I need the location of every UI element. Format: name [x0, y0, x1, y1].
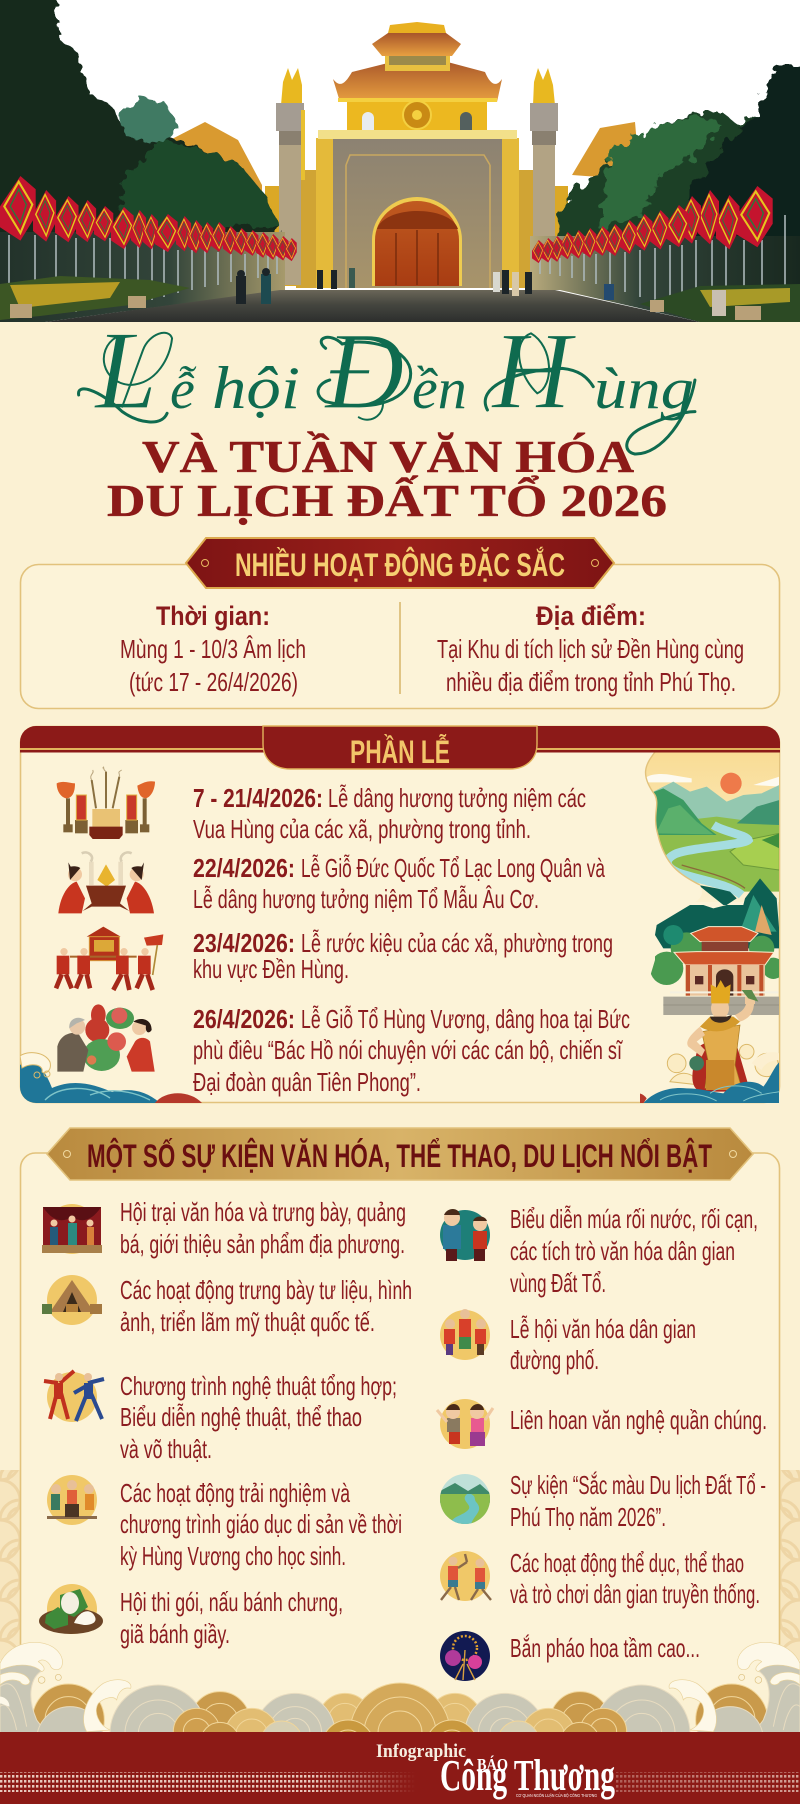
bottom center mound	[322, 1683, 478, 1783]
side patterns	[0, 1470, 800, 1660]
icon: tent	[42, 1275, 102, 1325]
gate side walls	[265, 170, 568, 288]
plaza ground	[45, 290, 700, 322]
red mound	[155, 1093, 202, 1103]
icon: banh chung	[39, 1584, 103, 1634]
bottom waves left half	[0, 1642, 372, 1782]
ceremony text: 26/4: Lễ Giỗ Tổ Hùng Vương, dâng hoa tại Bức	[301, 1004, 630, 1034]
ceremony text: 7 - 21/4: Vua Hùng của các xã, phường trong tỉnh.	[193, 814, 531, 844]
ceremony text: 22/4: 22/4/2026:	[193, 853, 295, 883]
logo: bao cong thuong	[440, 1751, 615, 1800]
bottom waves right half	[428, 1642, 800, 1782]
ceremony text: 26/4: Đại đoàn quân Tiên Phong”.	[193, 1067, 421, 1097]
icons and ceremony items	[56, 767, 630, 1097]
white foam crests	[0, 1642, 62, 1672]
item text	[120, 1371, 397, 1464]
trees near temple	[650, 925, 784, 985]
item text	[510, 1470, 766, 1532]
icon: landscape	[440, 1474, 490, 1524]
place block: Địa điểm:	[536, 601, 646, 631]
temple roof lower	[674, 952, 774, 965]
subtitle line 1: VÀ TUẦN VĂN HÓA	[142, 432, 635, 482]
banner: activities: NHIỀU HOẠT ĐỘNG ĐẶC SẮC	[235, 547, 565, 583]
right illustration: landscape, temple and king	[630, 752, 784, 1103]
item text	[510, 1204, 758, 1298]
logo: bao cong thuong: Công Thương	[440, 1751, 615, 1800]
gate main body	[316, 130, 519, 288]
ceremony text: 23/4: khu vực Đền Hùng.	[193, 954, 349, 984]
time block: (tức 17 - 26/4/2026)	[129, 667, 298, 697]
title script: ền	[412, 356, 467, 421]
icon: folk games	[440, 1551, 491, 1601]
decorative flourishes of the script title	[79, 333, 695, 454]
header band	[20, 726, 780, 770]
left column	[39, 1197, 412, 1649]
item text: kỳ Hùng Vương cho học sinh.	[120, 1541, 346, 1571]
title script: ễ	[170, 359, 197, 421]
icon: theatre	[42, 1204, 102, 1254]
ceremony text: 23/4	[193, 928, 613, 984]
arched door	[372, 197, 462, 286]
item text: bá, giới thiệu sản phẩm địa phương.	[120, 1229, 405, 1259]
terraces	[730, 833, 779, 870]
clouds	[645, 774, 779, 787]
item text	[120, 1275, 412, 1337]
item text: Các hoạt động trưng bày tư liệu, hình	[120, 1275, 412, 1305]
dot pattern right	[616, 1772, 800, 1792]
temple upper floor	[702, 942, 748, 952]
title script: Đ	[323, 310, 404, 432]
item text: và võ thuật.	[120, 1434, 212, 1464]
river	[667, 825, 748, 895]
area beneath flags	[0, 232, 800, 322]
panel frame	[20, 1153, 780, 1690]
small side buildings	[170, 122, 640, 240]
subtitle line 2: DU LỊCH ĐẤT TỔ 2026	[107, 475, 667, 526]
icon: street festival	[440, 1309, 490, 1360]
item text	[120, 1197, 406, 1259]
icon: incense altar	[57, 767, 155, 839]
item text: Hội thi gói, nấu bánh chưng,	[120, 1587, 343, 1617]
item text: ảnh, triển lãm mỹ thuật quốc tế.	[120, 1307, 375, 1337]
benches	[10, 296, 761, 320]
temple roof top	[691, 927, 758, 942]
title script	[79, 309, 695, 454]
time block	[120, 601, 306, 697]
ceremony text: 26/4: 26/4/2026:	[193, 1004, 295, 1034]
item text: giã bánh giầy.	[120, 1619, 230, 1649]
flags right row	[532, 186, 773, 263]
teal peaks	[740, 895, 777, 932]
ceremony text: 23/4: 23/4/2026:	[193, 928, 295, 958]
trees right	[558, 62, 800, 250]
time block: Thời gian:	[156, 601, 270, 631]
right tower	[530, 68, 558, 285]
fields	[658, 816, 779, 892]
stone terrace	[663, 997, 779, 1015]
far mountains	[654, 782, 779, 820]
panel frame	[20, 726, 780, 1102]
column divider	[399, 602, 401, 694]
item text	[120, 1587, 343, 1649]
item text	[510, 1314, 696, 1375]
time block: Mùng 1 - 10/3 Âm lịch	[120, 634, 306, 664]
place block	[437, 601, 744, 697]
right column	[437, 1204, 767, 1681]
icon: flower offering	[57, 1004, 155, 1072]
icon: offering figures	[58, 852, 154, 913]
item text: vùng Đất Tổ.	[510, 1268, 606, 1298]
item text: Chương trình nghệ thuật tổng hợp;	[120, 1371, 397, 1401]
temple hall	[685, 965, 765, 996]
banner: events	[47, 1128, 753, 1180]
item text: Các hoạt động trải nghiệm và	[120, 1478, 350, 1508]
ceremony text: 22/4: Lễ Giỗ Đức Quốc Tổ Lạc Long Quân và	[301, 853, 605, 883]
item text: chương trình giáo dục di sản về thời	[120, 1509, 402, 1539]
sun	[720, 773, 742, 794]
logo: bao cong thuong: BÁO	[477, 1755, 508, 1774]
title script: H	[490, 310, 577, 432]
panel frame	[20, 564, 780, 708]
icon: water puppetry	[440, 1209, 490, 1261]
king figure	[687, 980, 758, 1092]
gold outline of landscape	[646, 752, 700, 885]
icon: martial arts	[44, 1371, 104, 1422]
icon: mass arts	[437, 1399, 493, 1449]
left tower	[276, 68, 305, 285]
item text: Bắn pháo hoa tầm cao...	[510, 1633, 700, 1663]
clouds behind king	[667, 1044, 778, 1085]
footer	[0, 1732, 800, 1804]
title script: ùng	[594, 356, 694, 421]
ceremony text: 23/4: Lễ rước kiệu của các xã, phường trong	[301, 928, 613, 958]
right mountain	[737, 800, 779, 825]
banner: activities	[186, 538, 614, 588]
upper floor with sun disk	[347, 96, 487, 130]
ceremony text: 26/4: phù điêu “Bác Hồ nói chuyện với các cán bộ, chiến sĩ	[193, 1035, 623, 1065]
item text: Phú Thọ năm 2026”.	[510, 1502, 666, 1532]
ceremony text: 7 - 21/4: Lễ dâng hương tưởng niệm các	[328, 783, 586, 813]
flower beds	[0, 276, 800, 322]
item text: Lễ hội văn hóa dân gian	[510, 1314, 696, 1344]
panel: time and place	[20, 538, 780, 708]
ceremony text: 26/4	[193, 1004, 630, 1097]
hero photo: Den Hung gate at night	[0, 0, 800, 322]
tab: phan le: PHẦN LỄ	[350, 734, 450, 770]
tab: phan le	[263, 726, 537, 770]
logo: bao cong thuong: CƠ QUAN NGÔN LUẬN CỦA BỘ CÔNG THƯƠNG	[516, 1792, 597, 1798]
grey waves far left	[0, 1658, 47, 1733]
icon: fireworks	[440, 1631, 490, 1681]
panel: ceremony	[20, 726, 784, 1103]
trees left	[0, 0, 278, 250]
item text: đường phố.	[510, 1345, 599, 1375]
title script: hội	[212, 355, 300, 421]
ceremony text: 22/4: Lễ dâng hương tưởng niệm Tổ Mẫu Âu Cơ.	[193, 884, 539, 914]
item text: Biểu diễn nghệ thuật, thể thao	[120, 1402, 362, 1432]
flag poles	[9, 215, 785, 320]
ceremony text: 22/4	[193, 853, 605, 914]
panel: cultural events	[20, 1128, 780, 1690]
dark forest	[655, 878, 779, 948]
title script: L	[93, 309, 157, 433]
ceremony text: 7 - 21/4: 7 - 21/4/2026:	[193, 783, 323, 813]
item text	[510, 1548, 760, 1609]
roofs	[333, 22, 502, 102]
ceremony text: 7 - 21/4	[193, 783, 586, 844]
item text: Hội trại văn hóa và trưng bày, quảng	[120, 1197, 406, 1227]
label: infographic: Infographic	[376, 1741, 466, 1762]
left wave decoration	[20, 1053, 202, 1103]
dot pattern left	[0, 1772, 416, 1792]
waves bottom right	[630, 1052, 780, 1103]
icon: heritage class	[47, 1475, 97, 1525]
left green mountain	[650, 788, 717, 835]
icon: palanquin procession	[56, 927, 163, 990]
item text	[120, 1478, 402, 1571]
flags left row	[0, 176, 297, 261]
visitors silhouettes	[236, 268, 726, 316]
